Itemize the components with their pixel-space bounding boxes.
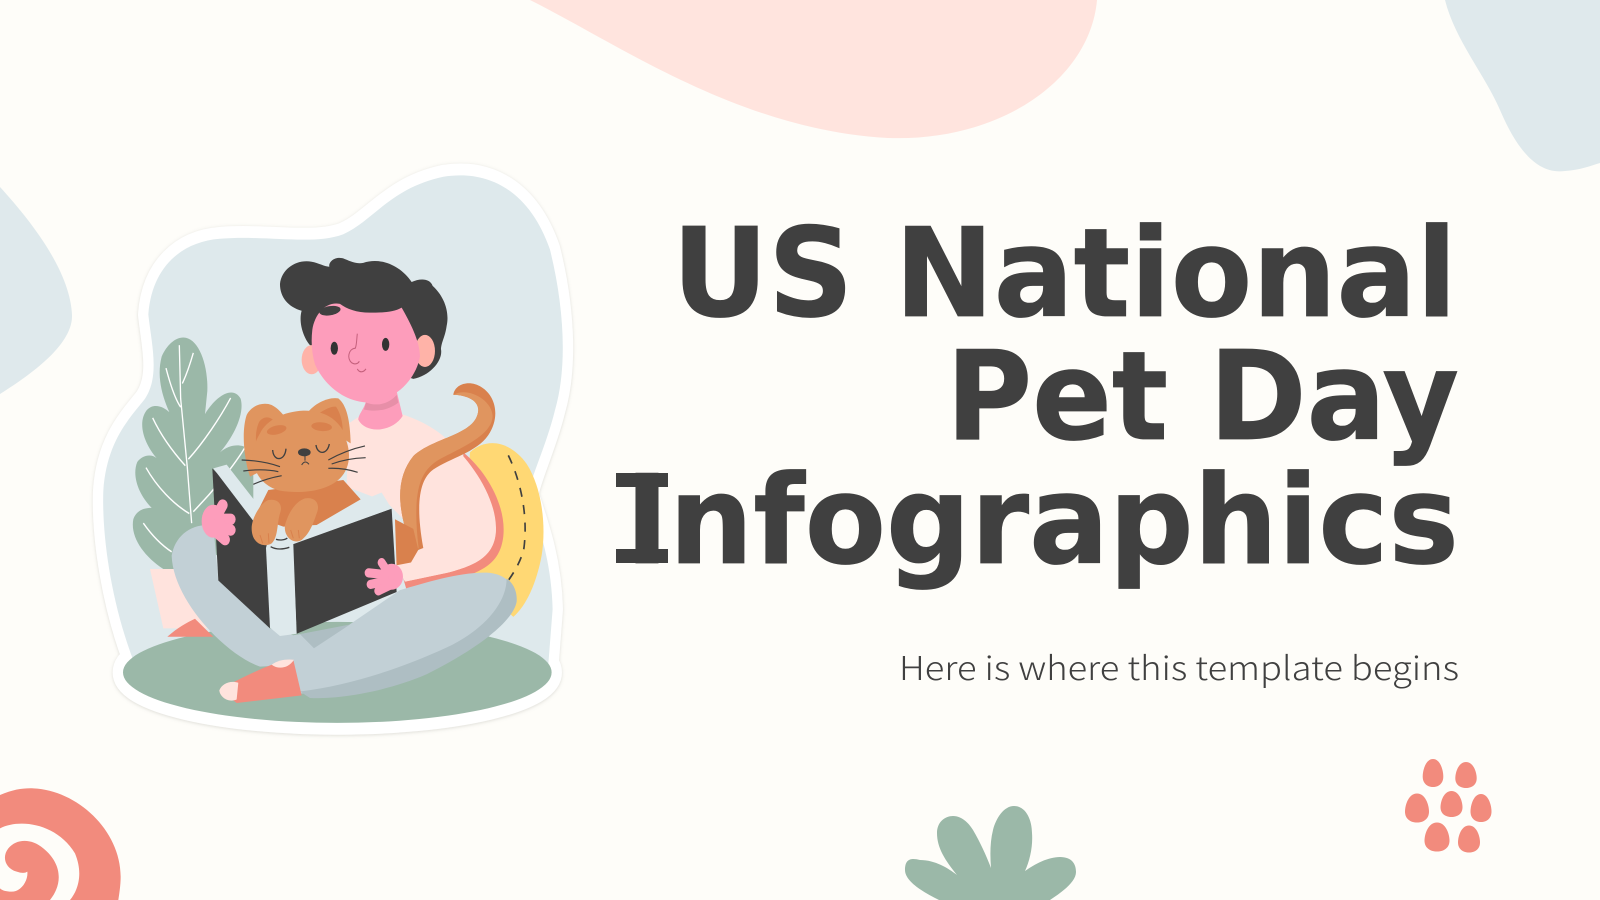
subtitle: Here is where this template begins (899, 642, 1459, 690)
eyes (331, 338, 389, 355)
right hand (369, 563, 399, 591)
tail (400, 383, 495, 552)
cat back (395, 519, 418, 567)
ground (123, 622, 552, 723)
back foot (167, 619, 213, 637)
cat mouth (302, 456, 309, 465)
plant leaf (133, 338, 253, 569)
title line 2: Pet Day (946, 325, 1459, 469)
blob: top right blue (1445, 0, 1600, 171)
cat head (253, 411, 349, 492)
hair (280, 258, 447, 379)
cat nose (298, 448, 311, 456)
shirt (347, 414, 496, 582)
neck (358, 391, 403, 430)
cushion stitches (508, 455, 525, 581)
title line 3: Infographics (625, 449, 1459, 593)
left ear (244, 404, 285, 477)
title line 1: US National (672, 202, 1457, 346)
eyebrow (319, 304, 341, 317)
cat paws (252, 498, 318, 545)
shirt shadow (400, 452, 504, 590)
title I serifs (616, 473, 668, 563)
cat eyes (273, 444, 329, 459)
cat (242, 398, 366, 549)
person scene (103, 175, 563, 723)
right ear (415, 335, 435, 367)
right arm (397, 527, 496, 582)
neck shadow (364, 395, 398, 411)
front foot (219, 660, 302, 703)
plant pot (150, 569, 210, 628)
pants shadow (300, 579, 517, 698)
book spine marks (271, 538, 289, 549)
background blob (103, 175, 563, 665)
sticker border (103, 175, 563, 723)
face (312, 303, 420, 403)
blob: left blue (0, 187, 72, 394)
icon: paw dots (1405, 759, 1492, 852)
cushion (463, 443, 543, 617)
icon: green plant (905, 806, 1076, 900)
nose and mouth (349, 334, 366, 372)
head patches (266, 421, 332, 437)
blob: top pink (530, 0, 1097, 138)
left hand (207, 505, 231, 540)
cat body (255, 480, 361, 527)
whiskers (242, 446, 366, 484)
icon: salmon swirl (0, 788, 121, 900)
title (625, 202, 1459, 593)
left ear (302, 345, 322, 374)
book (212, 465, 397, 636)
book shadow (300, 625, 350, 648)
right ear (308, 398, 351, 443)
illustration: person reading with cat (103, 175, 563, 723)
pants (172, 525, 517, 694)
